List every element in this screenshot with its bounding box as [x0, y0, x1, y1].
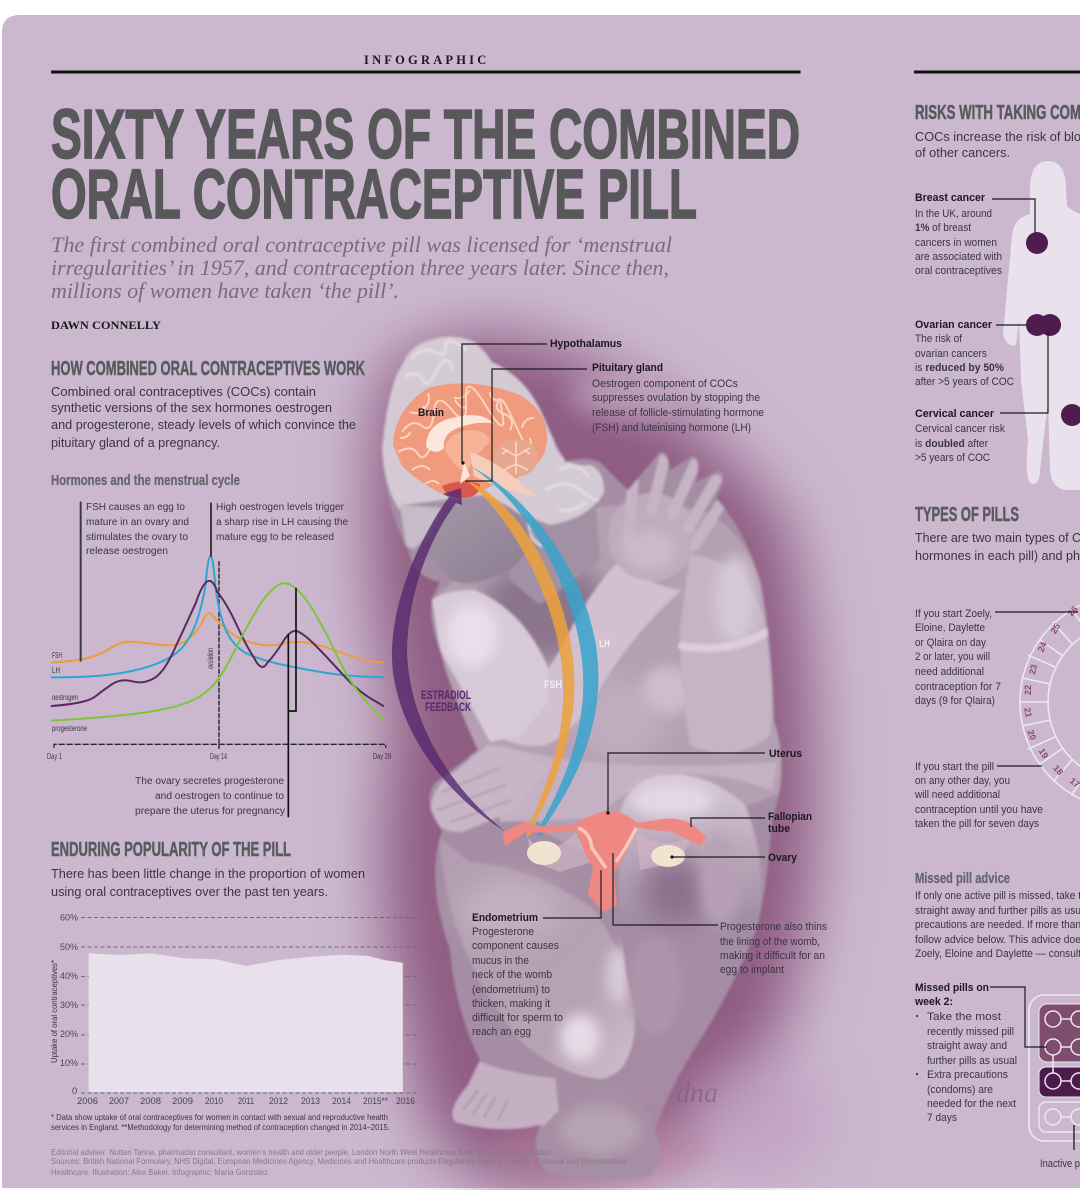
text: how COCs work: Combined oral contraceptives (COCs) contain [51, 384, 316, 399]
series labels [47, 648, 391, 761]
risk: cervical cancer: is doubled after [915, 438, 988, 450]
subtitle: irregularities’ in 1957, and contraception three years later. Since then, [51, 255, 669, 280]
pill wheel [1020, 594, 1080, 810]
area chart: uptake of oral contraceptives [50, 912, 419, 1107]
footnote: * Data show uptake of oral contraceptives for women in contact with sexual and reproductive health [51, 1112, 388, 1122]
text: missed pills on week 2: Take the most [927, 1011, 1001, 1023]
text: how COCs work: and progesterone, steady levels of which convince the [51, 417, 356, 432]
risk: ovarian cancer: Ovarian cancer [915, 319, 993, 331]
callout: high oestrogen: a sharp rise in LH causing the [216, 517, 348, 528]
label: Endometrium: component causes [472, 940, 559, 952]
arrow: LH pathway [470, 466, 598, 838]
subheading: missed pill advice: Missed pill advice [915, 870, 1010, 887]
text: missed pill advice [915, 890, 1080, 960]
line chart: hormones and the menstrual cycle [47, 502, 391, 817]
series labels: FSH [52, 651, 62, 660]
callout: high oestrogen: mature egg to be released [216, 532, 334, 543]
arrow: FSH pathway [466, 480, 574, 838]
series labels: Day 14 [210, 752, 227, 761]
text: risks: of other cancers. [915, 145, 1010, 160]
callout: other day start: If you start the pill [915, 761, 994, 773]
pill packet diagram [1029, 995, 1080, 1141]
area chart: uptake of oral contraceptives: 2016 [396, 1096, 415, 1107]
subheading: hormones chart: Hormones and the menstrual cycle [51, 472, 240, 489]
series labels: Day 1 [47, 752, 62, 761]
header rule and kicker: INFOGRAPHIC [364, 53, 489, 67]
callout: other day start [914, 761, 1043, 830]
risk: breast cancer: cancers in women [915, 237, 997, 249]
illustration: uterus and ovaries [503, 810, 707, 912]
callout: high oestrogen: High oestrogen levels trigger [216, 502, 345, 513]
label: Hypothalamus: Hypothalamus [550, 338, 622, 350]
pill wheel: 19 [1037, 747, 1050, 760]
text: missed pills on week 2: Extra precautions [927, 1069, 1008, 1081]
label: Endometrium: Endometrium [472, 912, 538, 924]
heading: popularity: ENDURING POPULARITY OF THE PILL [51, 839, 291, 861]
face [402, 495, 530, 583]
credits: Sources: British National Formulary, NHS Digital, European Medicines Agency, Medicines and Healthcare products Regulatory Agency, Faculty of Sexual and Reproductive [51, 1156, 626, 1166]
callout: other day start: taken the pill for seven days [915, 818, 1039, 830]
callout: FSH: stimulates the ovary to [86, 532, 188, 543]
area chart: uptake of oral contraceptives: 2007 [109, 1096, 129, 1107]
callout: Zoely start: Eloine, Daylette [915, 622, 985, 634]
text: missed pills on week 2 [914, 982, 1047, 1124]
callout: progesterone thins lining: egg to implant [720, 964, 784, 976]
forearm [498, 562, 682, 746]
risk: cervical cancer [915, 330, 1080, 464]
heading: how COCs work: HOW COMBINED ORAL CONTRACEPTIVES WORK [51, 358, 365, 380]
left upper arm [432, 590, 548, 742]
pill wheel: 26 [1066, 604, 1080, 618]
byline: DAWN CONNELLY [51, 318, 161, 332]
text: types of pills [915, 530, 1080, 563]
text: missed pills on week 2: Missed pills on [915, 982, 989, 994]
label: LH: LH [599, 638, 610, 650]
right foot [546, 1112, 560, 1126]
callout: progesterone thins lining [613, 853, 827, 976]
label: Pituitary gland [465, 362, 764, 481]
label: Hypothalamus [461, 338, 622, 465]
callout: Zoely start: days (9 for Qlaira) [915, 695, 995, 707]
pill wheel: 20 [1025, 729, 1038, 741]
callout: Zoely start: need additional [915, 666, 984, 678]
text: how COCs work [51, 384, 356, 450]
risk: breast cancer: are associated with [915, 251, 1002, 263]
title [51, 95, 800, 233]
area chart: uptake of oral contraceptives: 2013 [301, 1096, 320, 1107]
area chart: uptake of oral contraceptives: 0 [72, 1086, 77, 1097]
area chart: uptake of oral contraceptives: 20% [60, 1029, 79, 1040]
series labels: LH [52, 666, 60, 675]
label: Endometrium: neck of the womb [472, 969, 552, 981]
text: missed pills on week 2: needed for the next [927, 1098, 1016, 1110]
label: Endometrium: (endometrium) to [472, 984, 550, 996]
callout: other day start: contraception until you have [915, 804, 1043, 816]
area chart: uptake of oral contraceptives: Uptake of oral contraceptives* [50, 960, 59, 1063]
risk: ovarian cancer: after >5 years of COC [915, 376, 1014, 388]
text: missed pills on week 2: straight away and [927, 1040, 1007, 1052]
left ovary [527, 841, 561, 865]
area chart: uptake of oral contraceptives: 2010 [205, 1096, 223, 1107]
callout: FSH: release oestrogen [86, 546, 168, 557]
label: Endometrium: Progesterone [472, 926, 534, 938]
callout: FSH [86, 502, 189, 557]
label: estradiol feedback [421, 690, 472, 714]
text: popularity [51, 866, 365, 899]
label: Pituitary gland: (FSH) and luteinising hormone (LH) [592, 422, 751, 434]
illustration: crouching statue figure [382, 336, 790, 1180]
arrow: estradiol feedback [392, 488, 506, 832]
pill wheel: 23 [1027, 663, 1039, 675]
label: Endometrium: mucus in the [472, 955, 529, 967]
risk: breast cancer: In the UK, around [915, 208, 992, 220]
label: Uterus: Uterus [769, 748, 802, 760]
series labels: oestrogen [52, 693, 78, 702]
text: missed pills on week 2: recently missed pill [927, 1026, 1014, 1038]
area chart: uptake of oral contraceptives: 40% [60, 971, 79, 982]
pill wheel: 18 [1051, 763, 1065, 777]
label: Pituitary gland: Oestrogen component of COCs [592, 378, 738, 390]
area chart: uptake of oral contraceptives: 30% [60, 1000, 79, 1011]
upper arm and armband [680, 555, 772, 753]
label: Endometrium: difficult for sperm to [472, 1012, 563, 1024]
label: Endometrium [472, 870, 601, 1038]
text: missed pills on week 2: further pills as usual [927, 1055, 1017, 1067]
title: ORAL CONTRACEPTIVE PILL [51, 155, 697, 233]
area chart: uptake of oral contraceptives: 2012 [269, 1096, 288, 1107]
callout: Zoely start: or Qlaira on day [915, 637, 986, 649]
callout: progesterone thins lining: the lining of the womb, [720, 936, 820, 948]
risk: cervical cancer: Cervical cancer risk [915, 423, 1005, 435]
label: inactive pills [1040, 1125, 1080, 1170]
risk: cervical cancer: Cervical cancer [915, 408, 995, 420]
label: FSH: FSH [544, 679, 562, 691]
label: Pituitary gland: release of follicle-stimulating hormone [592, 407, 764, 419]
area chart: uptake of oral contraceptives: 60% [60, 912, 79, 924]
label: estradiol feedback: FEEDBACK [425, 702, 472, 714]
series labels: Day 28 [373, 752, 391, 761]
left foot [452, 1058, 560, 1129]
text: how COCs work: synthetic versions of the sex hormones oestrogen [51, 400, 332, 415]
risk: breast cancer: Breast cancer [915, 192, 986, 204]
footnote: services in England. **Methodology for determining method of contraception changed in 2014–2015. [51, 1122, 390, 1132]
label: Fallopian tube [691, 811, 812, 835]
pill wheel: 24 [1036, 640, 1049, 653]
pill wheel: 22 [1023, 685, 1033, 695]
label: Endometrium: thicken, making it [472, 998, 550, 1010]
risk: ovarian cancer: ovarian cancers [915, 348, 987, 360]
callout: Zoely start [915, 608, 1078, 707]
risk: ovarian cancer: is reduced by 50% [915, 362, 1004, 374]
text: missed pills on week 2: 7 days [927, 1112, 957, 1124]
label: Pituitary gland: suppresses ovulation by stopping the [592, 392, 760, 404]
text: missed pills on week 2: (condoms) are [927, 1084, 993, 1096]
waist hand [430, 745, 502, 833]
area chart: uptake of oral contraceptives: 10% [60, 1058, 79, 1069]
series labels: progesterone [52, 724, 87, 733]
right leg [618, 774, 761, 1062]
credits [51, 1147, 626, 1177]
callout: Zoely start: If you start Zoely, [915, 608, 992, 620]
callout: other day start: on any other day, you [915, 775, 1010, 787]
area chart: uptake of oral contraceptives: 50% [60, 942, 79, 953]
callout: ovary secretes: The ovary secretes progesterone [135, 776, 284, 787]
footnote [51, 1112, 390, 1132]
label: estradiol feedback: ESTRADIOL [421, 690, 471, 702]
text: how COCs work: pituitary gland of a pregnancy. [51, 435, 220, 450]
risk: breast cancer [915, 192, 1048, 277]
label: Ovary: Ovary [768, 852, 798, 864]
label: Ovary [670, 852, 798, 864]
callout: other day start: will need additional [914, 789, 1000, 801]
callout: FSH: FSH causes an egg to [86, 502, 185, 513]
header rule and kicker [51, 53, 800, 74]
right ovary [651, 845, 685, 867]
label: Fallopian tube: tube [768, 823, 790, 835]
callout: progesterone thins lining: Progesterone also thins [720, 921, 827, 933]
callout: progesterone thins lining: making it difficult for an [720, 950, 825, 962]
subtitle: millions of women have taken ‘the pill’. [51, 278, 399, 303]
area chart: uptake of oral contraceptives: 2011 [238, 1096, 254, 1107]
credits: Healthcare. Illustration: Alex Baker. Infographic: Maria Gonzalez [51, 1167, 268, 1177]
subtitle: The first combined oral contraceptive pill was licensed for ‘menstrual [51, 232, 672, 257]
callout: ovary secretes: and oestrogen to continue to [155, 791, 284, 802]
torso [432, 504, 790, 860]
text: popularity: There has been little change in the proportion of women [51, 866, 365, 881]
credits: Editorial adviser: Nuttan Tanna, pharmacist consultant, women’s health and older people, London North West Healthcare NHS Trust, Harrow, London [51, 1147, 551, 1157]
risk: breast cancer: oral contraceptives [915, 265, 1002, 277]
risk: ovarian cancer: The risk of [915, 333, 963, 345]
label: Fallopian tube: Fallopian [768, 811, 812, 823]
text: popularity: using oral contraceptives over the past ten years. [51, 884, 328, 899]
area chart: uptake of oral contraceptives: 2006 [77, 1096, 98, 1107]
heading: types of pills: TYPES OF PILLS [915, 504, 1019, 526]
area chart: uptake of oral contraceptives: 2009 [172, 1096, 193, 1107]
callout: ovary secretes: prepare the uterus for pregnancy [135, 806, 285, 817]
area chart: uptake of oral contraceptives: 2015** [363, 1096, 388, 1107]
left thigh [440, 838, 636, 1079]
callout: high oestrogen [216, 502, 348, 543]
text: risks [915, 129, 1080, 160]
risk: ovarian cancer [915, 314, 1061, 388]
area chart: uptake of oral contraceptives: 2008 [140, 1096, 161, 1107]
risk: breast cancer: 1% of breast [915, 222, 971, 234]
illustration halo [370, 334, 830, 1185]
callout: FSH: mature in an ovary and [86, 517, 189, 528]
hair curls [405, 341, 598, 546]
label: Pituitary gland: Pituitary gland [592, 362, 663, 374]
body silhouette [1003, 161, 1080, 490]
illustration: brain [393, 383, 547, 498]
risk: cervical cancer: >5 years of COC [915, 452, 990, 464]
series labels: ovulation [206, 648, 215, 669]
callout: Zoely start: contraception for 7 [915, 681, 1001, 693]
label: Brain: Brain [418, 407, 444, 419]
right column rule [914, 70, 1080, 74]
signature: dna [676, 1078, 718, 1109]
raised hand [608, 493, 696, 581]
area chart: uptake of oral contraceptives: 2014 [332, 1096, 351, 1107]
callout: ovary secretes [135, 776, 285, 817]
pill wheel: 25 [1049, 622, 1062, 635]
pill wheel: 21 [1022, 707, 1034, 718]
subtitle [51, 232, 672, 303]
neck [510, 508, 600, 605]
text: missed pills on week 2: week 2: [914, 996, 953, 1008]
hair dome [382, 336, 604, 525]
callout: Zoely start: 2 or later, you will [915, 651, 990, 663]
label: Uterus [606, 748, 802, 815]
label: Endometrium: reach an egg [472, 1026, 531, 1038]
belly and waist [500, 745, 778, 822]
text: risks: COCs increase the risk of blo [915, 129, 1080, 144]
